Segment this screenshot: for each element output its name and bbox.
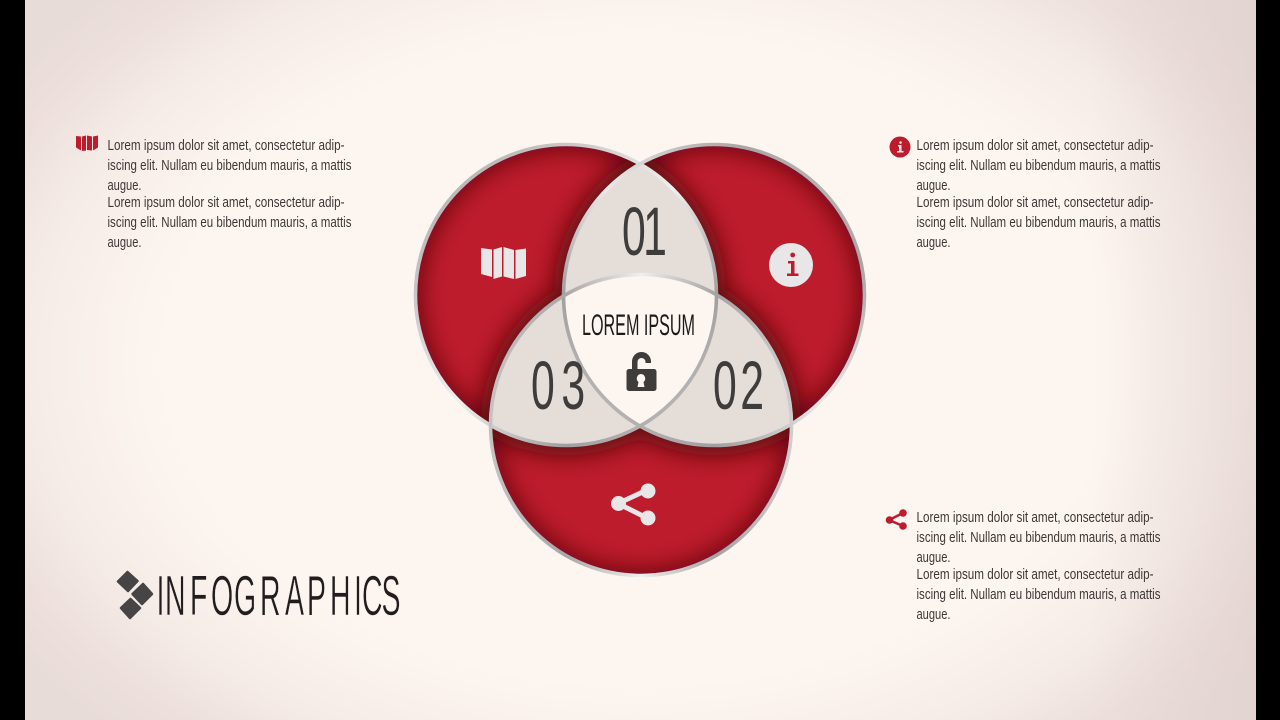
overlap: left <box>492 299 636 444</box>
silver ring: bottom <box>490 274 792 576</box>
paragraph: iscing elit. Nullam eu bibendum mauris, a mattis <box>108 158 352 174</box>
right black bar <box>1256 0 1280 720</box>
circle: right red <box>644 146 863 421</box>
icon: logo diamonds <box>118 572 152 618</box>
paragraph: Lorem ipsum dolor sit amet, consectetur adip- <box>916 567 1154 583</box>
paragraph: Lorem ipsum dolor sit amet, consectetur adip- <box>916 510 1154 526</box>
paragraph: augue. <box>916 178 950 194</box>
center label: LOREM IPSUM <box>582 309 695 342</box>
paragraph: Lorem ipsum dolor sit amet, consectetur adip- <box>108 138 345 154</box>
paragraph <box>916 510 1160 623</box>
paragraph: augue. <box>108 235 142 251</box>
overlap: right <box>644 298 790 444</box>
paragraph: augue. <box>916 550 950 566</box>
circle: bottom red <box>492 427 790 574</box>
paragraph: iscing elit. Nullam eu bibendum mauris, a mattis <box>916 530 1160 546</box>
paragraph: iscing elit. Nullam eu bibendum mauris, a mattis <box>108 215 352 231</box>
left black bar <box>0 0 25 720</box>
number 01: 01 <box>622 194 667 271</box>
icon: red info <box>890 136 910 158</box>
icon: red map <box>76 136 98 151</box>
text block: left <box>76 136 352 251</box>
overlap: top <box>565 166 715 293</box>
paragraph: Lorem ipsum dolor sit amet, consectetur adip- <box>108 195 345 211</box>
venn diagram <box>414 142 866 577</box>
circle: left red <box>417 146 636 422</box>
paragraph: Lorem ipsum dolor sit amet, consectetur adip- <box>916 195 1154 211</box>
paragraph <box>108 138 352 251</box>
paragraph: Lorem ipsum dolor sit amet, consectetur adip- <box>916 138 1154 154</box>
paragraph: augue. <box>108 178 142 194</box>
icon: share <box>611 484 656 526</box>
silver ring: left <box>416 144 716 446</box>
paragraph <box>916 138 1160 251</box>
silver ring: right <box>564 144 864 446</box>
wordmark: INFOGRAPHICS <box>156 563 401 628</box>
icon: open padlock <box>626 352 656 391</box>
paragraph: augue. <box>916 235 950 251</box>
number 03: 03 <box>531 348 585 425</box>
paragraph: augue. <box>916 607 950 623</box>
overlap: center <box>566 276 715 424</box>
paragraph: iscing elit. Nullam eu bibendum mauris, a mattis <box>916 587 1160 603</box>
right edge shading <box>1090 0 1256 720</box>
icon: map <box>481 247 526 279</box>
paragraph: iscing elit. Nullam eu bibendum mauris, a mattis <box>916 215 1160 231</box>
icon: red share <box>886 509 907 530</box>
paragraph: iscing elit. Nullam eu bibendum mauris, a mattis <box>916 158 1160 174</box>
number 02: 02 <box>713 348 764 425</box>
text block: bottom right <box>886 509 1160 623</box>
text block: top right <box>890 136 1160 251</box>
icon: info <box>769 243 813 287</box>
logo <box>118 563 401 628</box>
